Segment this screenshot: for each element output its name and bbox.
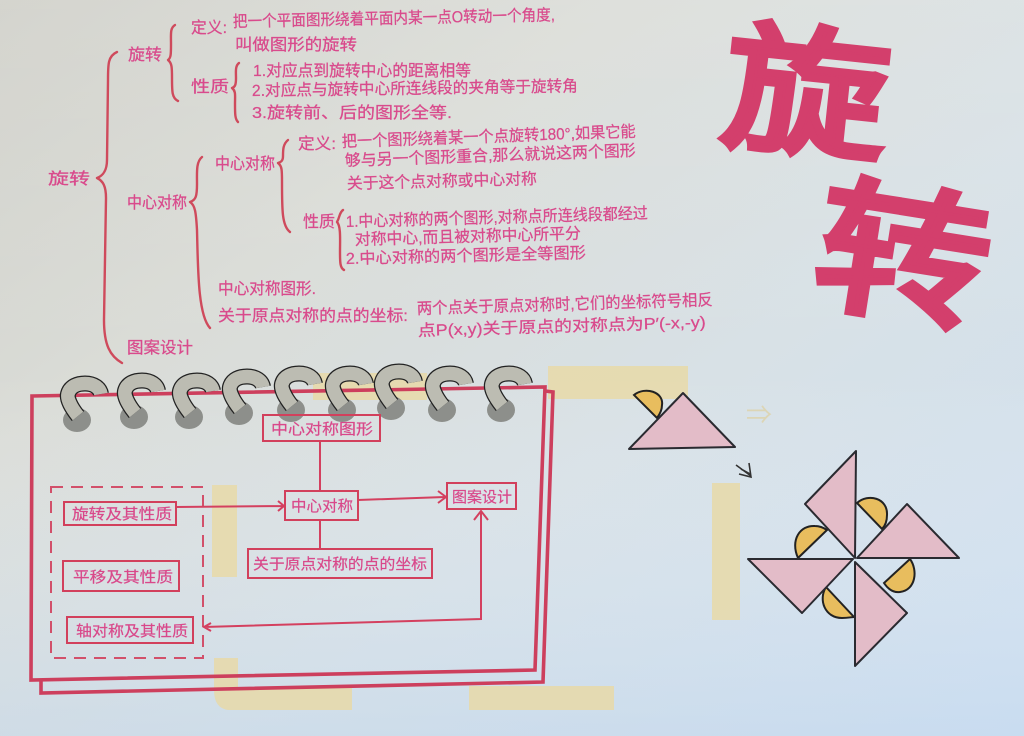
coordinates label: 关于原点对称的点的坐标: xyxy=(218,307,408,325)
coordinates explanation xyxy=(417,291,713,340)
rotation definition: 叫做图形的旋转 xyxy=(235,36,357,54)
root brace xyxy=(97,52,122,363)
central symmetry properties list xyxy=(346,205,648,268)
central symmetry definition: 把一个图形绕着某一个点旋转180°,如果它能 xyxy=(342,123,636,151)
rotation properties list xyxy=(252,61,578,122)
box: rotation and its properties xyxy=(64,502,176,525)
flow connectors and arrows xyxy=(176,441,488,631)
faint arrow: ⇒ xyxy=(746,400,772,430)
box: pattern design xyxy=(447,483,516,509)
brace: central symmetry definition xyxy=(278,140,290,232)
central symmetry properties list: 对称中心,而且被对称中心所平分 xyxy=(355,225,581,249)
box: translation and its properties: 平移及其性质 xyxy=(73,569,173,586)
box: central symmetric figure xyxy=(263,415,380,441)
title character 旋: 旋 xyxy=(716,10,896,181)
box: translation and its properties xyxy=(63,561,179,591)
brace: central symmetry xyxy=(190,157,210,328)
mind map: rotation concepts xyxy=(48,6,713,363)
label: properties: 性质 xyxy=(191,78,229,96)
central symmetry definition: 定义: xyxy=(298,135,336,153)
brace: rotation xyxy=(168,25,178,101)
coordinates explanation: 点P(x,y)关于原点的对称点为P′(-x,-y) xyxy=(418,313,706,340)
box: rotation and its properties: 旋转及其性质 xyxy=(72,506,172,523)
base figure: triangle with semicircle xyxy=(629,391,735,449)
brace: central symmetry properties xyxy=(337,210,344,270)
rotation definition: 定义: xyxy=(191,19,227,37)
rotation definition: 把一个平面图形绕着平面内某一点O转动一个角度, xyxy=(233,6,555,31)
central symmetry properties list: 1.中心对称的两个图形,对称点所连线段都经过 xyxy=(346,205,648,231)
pinwheel triangles xyxy=(748,451,959,666)
notebook page outlines xyxy=(31,387,553,693)
notebook panel xyxy=(31,372,553,693)
decorative tape strips xyxy=(212,366,740,710)
central symmetry definition: 关于这个点对称或中心对称 xyxy=(347,170,537,193)
central symmetry definition xyxy=(298,123,636,193)
rotation properties list: 1.对应点到旋转中心的距离相等 xyxy=(253,61,471,80)
box: central symmetry xyxy=(285,491,358,520)
box: axial symmetry and its properties xyxy=(67,617,193,643)
central symmetry properties list: 2.中心对称的两个图形是全等图形 xyxy=(346,244,586,268)
branch label: pattern design: 图案设计 xyxy=(127,339,193,357)
rotation properties list: 2.对应点与旋转中心所连线段的夹角等于旋转角 xyxy=(252,76,578,100)
rotation definition xyxy=(191,6,555,54)
label: properties of central symmetry: 性质 xyxy=(303,213,335,231)
box: pattern design: 图案设计 xyxy=(452,488,512,506)
root label: 旋转 xyxy=(48,170,90,188)
title character 转: 转 xyxy=(804,163,1001,353)
rotation properties list: 3.旋转前、后的图形全等. xyxy=(252,104,452,122)
hand-drawn arrow pointing to pinwheel xyxy=(736,463,751,477)
box: coordinates of symmetric points: 关于原点对称的点的坐标 xyxy=(253,556,427,573)
branch label: central symmetry: 中心对称 xyxy=(127,194,187,212)
dashed group frame xyxy=(51,487,203,658)
box: axial symmetry and its properties: 轴对称及其性质 xyxy=(76,623,188,640)
central symmetry definition: 够与另一个图形重合,那么就说这两个图形 xyxy=(345,142,636,170)
coordinates explanation: 两个点关于原点对称时,它们的坐标符号相反 xyxy=(417,291,713,318)
pinwheel figure xyxy=(748,451,959,666)
spiral binding rings xyxy=(63,372,525,432)
sub-branch label: central symmetry: 中心对称 xyxy=(215,155,275,173)
box: coordinates of symmetric points xyxy=(248,549,432,578)
title: 旋转 xyxy=(716,10,1001,353)
branch label: rotation: 旋转 xyxy=(128,46,162,64)
box: central symmetric figure: 中心对称图形 xyxy=(271,421,373,438)
pinwheel semicircles xyxy=(795,498,915,618)
box: central symmetry: 中心对称 xyxy=(291,498,353,515)
brace: properties xyxy=(232,63,239,122)
central symmetric figure label: 中心对称图形. xyxy=(218,280,316,298)
